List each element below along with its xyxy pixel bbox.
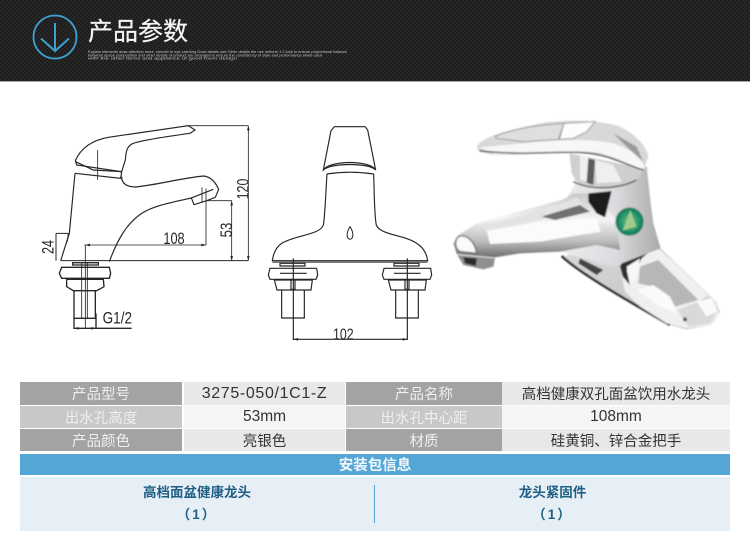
item: fasteners — [519, 485, 586, 522]
header fine print — [88, 50, 347, 60]
spec table: 亮银色 — [243, 434, 286, 450]
spec table: 出水孔中心距 — [380, 410, 468, 426]
spec table: 产品名称 — [395, 387, 453, 403]
header fine print: between space composition and other details of product are arranged to ensure the consistency of style and performance when used — [88, 54, 322, 58]
faucet base — [562, 243, 720, 329]
item: faucet — [143, 485, 251, 522]
item: fasteners: （1） — [532, 507, 573, 522]
item: faucet: 高档面盆健康龙头 — [143, 485, 251, 500]
spec table: 硅黄铜、锌合金把手 — [551, 434, 681, 450]
row 3: 产品颜色 — [72, 434, 130, 450]
front elevation drawing: 102 — [333, 326, 354, 343]
row 3 — [20, 429, 182, 451]
side elevation drawing: G1/2 — [103, 308, 132, 327]
side elevation drawing: 108 — [163, 229, 185, 248]
install package heading bar — [20, 454, 730, 475]
header band — [0, 0, 750, 82]
item: faucet: （1） — [177, 507, 217, 522]
collar — [569, 153, 643, 188]
spec table: 高档健康双孔面盆饮用水龙头 — [522, 387, 710, 403]
row 2: 出水孔高度 — [65, 410, 137, 426]
header fine print: Explain elements draw attention more, smooth to eye catching Draw details use Other details the use uniform 1:1 look to ensure proportional balance — [88, 50, 347, 54]
spec table: 材质 — [410, 434, 438, 450]
row 2 — [20, 406, 182, 428]
row 1 — [20, 382, 182, 405]
side elevation drawing: 53 — [217, 223, 236, 237]
row 1: 产品型号 — [72, 387, 130, 403]
side elevation drawing: 24 — [38, 240, 57, 254]
side elevation drawing — [38, 125, 252, 330]
spec table: 3275-050/1C1-Z — [202, 384, 327, 402]
faucet column — [560, 160, 661, 267]
handle — [477, 121, 648, 170]
install package heading bar: 安装包信息 — [339, 458, 411, 474]
spout — [453, 191, 620, 269]
spec table: 53mm — [243, 408, 286, 425]
header fine print: with the other items and appliance of good room design — [88, 56, 237, 60]
spec table: 108mm — [590, 408, 642, 425]
front elevation drawing — [268, 126, 432, 343]
install package panel — [20, 477, 730, 531]
product photo: chrome faucet — [452, 120, 720, 330]
side elevation drawing: 120 — [233, 179, 252, 199]
green badge — [615, 207, 644, 236]
icon: down arrow in circle — [32, 14, 78, 60]
title: 产品参数 — [88, 18, 188, 46]
item: fasteners: 龙头紧固件 — [519, 485, 586, 500]
spec table — [20, 382, 730, 451]
